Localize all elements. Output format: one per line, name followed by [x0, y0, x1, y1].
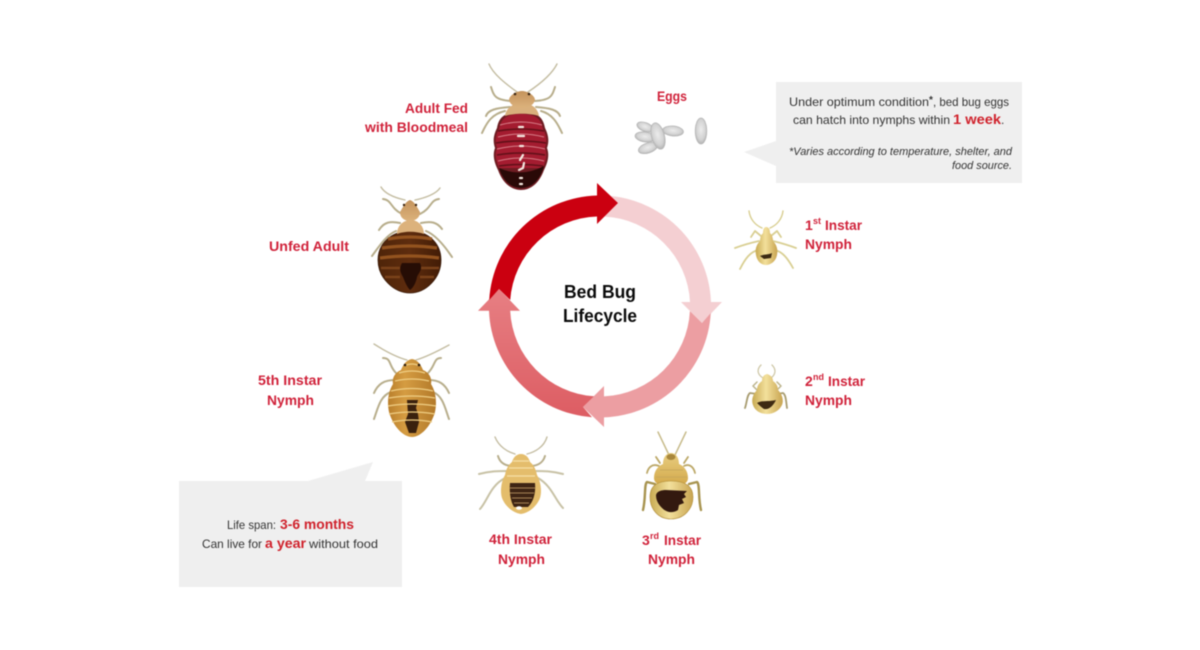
icon: second instar nymph [745, 365, 787, 414]
callout: egg hatching: Under optimum condition [789, 95, 929, 109]
label: first instar: Instar [825, 217, 863, 233]
arrow: lower right segment, pink [583, 311, 711, 427]
label: third instar: 3 [642, 532, 650, 548]
label: adult fed [364, 100, 468, 135]
icon: fourth instar nymph [479, 437, 563, 514]
callout: egg hatching: *Varies according to temperature, shelter, and [789, 146, 1013, 158]
icon: eggs [634, 118, 707, 156]
icon: first instar nymph [735, 211, 796, 269]
callout: egg hatching [744, 82, 1022, 183]
callout: egg hatching: , bed bug eggs [933, 95, 1009, 109]
label: third instar [642, 531, 702, 567]
callout: egg hatching: food source. [952, 160, 1012, 172]
icon: adult fed bed bug [482, 64, 562, 190]
callout: life span: 3-6 months [280, 516, 354, 532]
label: second instar: Instar [828, 373, 866, 389]
label: second instar [805, 372, 866, 408]
label: fifth instar: 5th Instar [258, 372, 323, 388]
label: first instar: st [813, 216, 821, 226]
arrow: upper right segment, pale [604, 196, 722, 323]
label: fourth instar: 4th Instar [489, 531, 553, 547]
label: second instar: Nymph [805, 392, 852, 408]
label: unfed adult: Unfed Adult [269, 238, 349, 254]
arrow: upper left segment, dark red [489, 183, 618, 300]
center title [563, 282, 637, 326]
label: first instar: 1 [805, 217, 813, 233]
label: adult fed: Adult Fed [405, 100, 468, 116]
callout: egg hatching: * [929, 95, 933, 106]
icon: third instar nymph [643, 432, 701, 519]
label: third instar: Nymph [648, 551, 695, 567]
lifecycle ring [478, 183, 722, 427]
label: third instar: rd [650, 531, 659, 541]
label: first instar: Nymph [805, 236, 852, 252]
label: eggs: Eggs [657, 88, 687, 104]
arrow: lower left segment, deep pink [478, 289, 594, 417]
callout: egg hatching: can hatch into nymphs within [793, 113, 950, 127]
label: adult fed: with Bloodmeal [364, 119, 468, 135]
icon: unfed adult bed bug [372, 187, 452, 293]
callout: life span [179, 462, 402, 587]
label: fourth instar [489, 531, 553, 567]
callout: egg hatching: . [1001, 113, 1004, 127]
callout: life span: without food [308, 537, 378, 551]
center title: Bed Bug [564, 282, 636, 302]
callout: life span: Life span: [227, 518, 276, 532]
label: fifth instar [258, 372, 323, 408]
callout: life span: Can live for [202, 537, 262, 551]
callout: life span: a year [265, 535, 307, 551]
center title: Lifecycle [563, 306, 637, 326]
label: second instar: nd [813, 372, 824, 382]
label: first instar [805, 216, 863, 252]
label: fourth instar: Nymph [498, 551, 545, 567]
icon: fifth instar nymph [374, 344, 449, 437]
label: second instar: 2 [805, 373, 813, 389]
label: fifth instar: Nymph [267, 392, 314, 408]
label: third instar: Instar [664, 532, 702, 548]
callout: egg hatching: 1 week [953, 111, 1001, 127]
